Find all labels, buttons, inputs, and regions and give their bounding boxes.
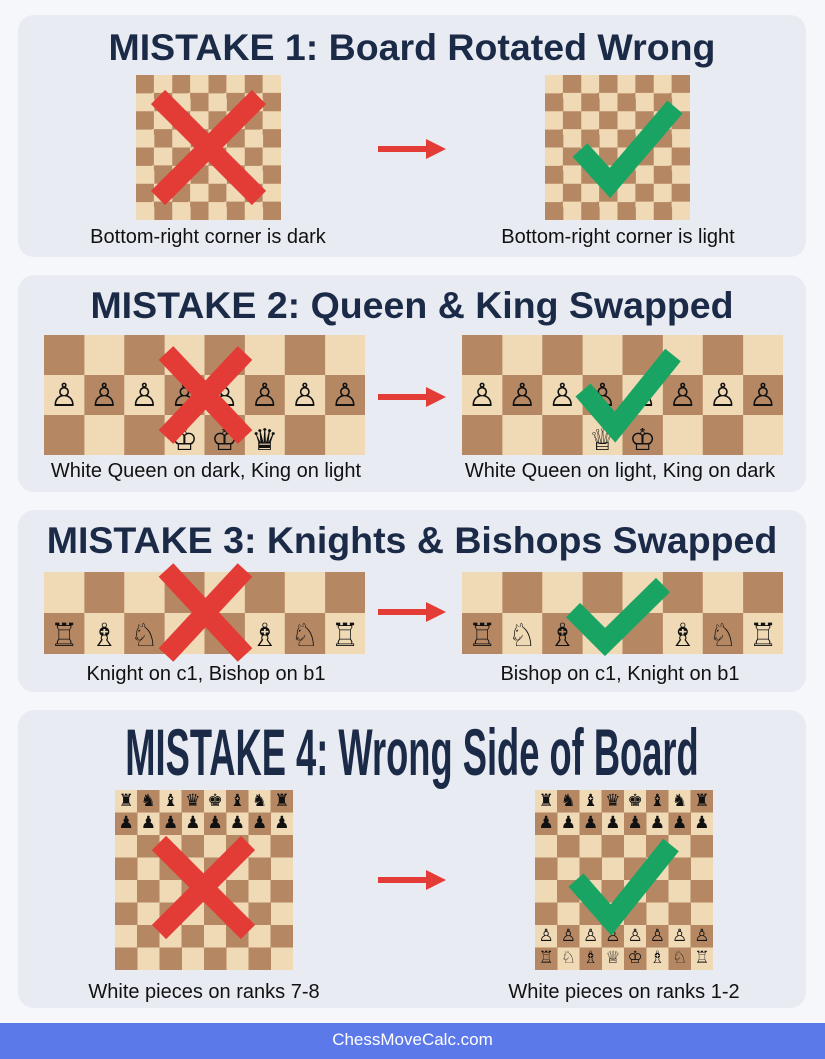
board: wrong side: ♛ xyxy=(185,791,200,811)
panel: mistake 4 xyxy=(18,710,806,1008)
board: queen king correct: ♙ xyxy=(749,376,777,414)
board: correct side: ♙ xyxy=(583,926,598,946)
board: wrong rotation xyxy=(136,75,281,220)
caption 4 right: White pieces on ranks 1-2 xyxy=(508,981,740,1003)
board: correct side: ♙ xyxy=(672,926,687,946)
board: correct side: ♜ xyxy=(538,791,554,811)
board: queen king correct: ♙ xyxy=(548,376,577,414)
board: queen king wrong: ♛ xyxy=(251,423,278,458)
board: correct side xyxy=(535,790,713,970)
board: correct side: ♔ xyxy=(628,948,643,968)
board: correct side: ♘ xyxy=(672,948,687,968)
board: correct side: ♟ xyxy=(605,813,620,833)
icon: red cross 3 xyxy=(158,563,252,662)
board: correct side: ♟ xyxy=(694,813,710,833)
board: wrong side: ♟ xyxy=(118,813,134,833)
board: knights bishops wrong: ♗ xyxy=(250,616,279,654)
panel: mistake 1 xyxy=(18,15,806,257)
board: knights bishops correct: ♗ xyxy=(548,616,577,654)
board: queen king wrong: ♔ xyxy=(171,423,198,458)
board: correct side: ♝ xyxy=(650,791,665,811)
board: correct side: ♟ xyxy=(583,813,598,833)
board: correct side: ♜ xyxy=(694,791,710,811)
caption 4 left: White pieces on ranks 7-8 xyxy=(88,981,320,1003)
board: knights bishops correct: ♖ xyxy=(468,616,496,654)
panel: mistake 2 xyxy=(18,275,806,492)
board: correct side: ♗ xyxy=(583,948,598,968)
board: correct side: ♝ xyxy=(583,791,598,811)
board: queen king correct: ♔ xyxy=(629,423,656,458)
board: wrong side: ♟ xyxy=(230,813,245,833)
board: queen king wrong xyxy=(44,335,365,455)
board: wrong side: ♟ xyxy=(141,813,156,833)
caption 3 right: Bishop on c1, Knight on b1 xyxy=(500,663,740,685)
board: correct side: ♟ xyxy=(628,813,643,833)
arrow 4 xyxy=(378,870,446,890)
title 4: MISTAKE 4: Wrong Side of Board xyxy=(125,715,699,789)
caption 2 right: White Queen on light, King on dark xyxy=(465,460,775,482)
icon: green check 4 xyxy=(568,838,679,936)
board: correct side: ♗ xyxy=(650,948,665,968)
footer: ChessMoveCalc.com xyxy=(332,1030,493,1049)
board: queen king wrong: ♔ xyxy=(211,423,238,458)
board: correct side: ♛ xyxy=(605,791,620,811)
board: queen king wrong: ♙ xyxy=(130,376,159,414)
title 2: MISTAKE 2: Queen & King Swapped xyxy=(90,284,734,326)
board: queen king wrong: ♙ xyxy=(250,376,279,414)
board: wrong side: ♟ xyxy=(185,813,200,833)
board: correct side: ♚ xyxy=(628,791,643,811)
board: queen king wrong: ♙ xyxy=(331,376,359,414)
board: correct side: ♟ xyxy=(650,813,665,833)
board: knights bishops wrong xyxy=(44,572,365,654)
board: wrong side xyxy=(115,790,293,970)
board: knights bishops wrong: ♖ xyxy=(331,616,359,654)
board: correct side: ♟ xyxy=(538,813,554,833)
board: correct side: ♙ xyxy=(561,926,576,946)
board: queen king wrong: ♙ xyxy=(210,376,239,414)
board: correct side: ♙ xyxy=(694,926,710,946)
board: knights bishops correct: ♘ xyxy=(508,616,537,654)
board: correct side: ♞ xyxy=(672,791,687,811)
board: wrong side: ♟ xyxy=(208,813,223,833)
board: wrong side: ♟ xyxy=(252,813,267,833)
board: correct rotation xyxy=(545,75,690,220)
board: wrong side: ♝ xyxy=(163,791,178,811)
board: queen king correct: ♕ xyxy=(589,423,616,458)
board: queen king correct: ♙ xyxy=(668,376,697,414)
arrow 1 xyxy=(378,139,446,159)
title 1: MISTAKE 1: Board Rotated Wrong xyxy=(109,26,715,68)
board: queen king correct: ♙ xyxy=(468,376,496,414)
caption 1 left: Bottom-right corner is dark xyxy=(90,226,326,248)
board: knights bishops wrong: ♗ xyxy=(90,616,119,654)
board: knights bishops correct: ♖ xyxy=(749,616,777,654)
board: correct side: ♟ xyxy=(561,813,576,833)
footer xyxy=(0,1023,825,1059)
board: wrong side: ♞ xyxy=(141,791,156,811)
board: correct side: ♞ xyxy=(561,791,576,811)
icon: red cross 4 xyxy=(152,836,255,940)
board: knights bishops correct: ♘ xyxy=(708,616,737,654)
board: knights bishops wrong: ♘ xyxy=(290,616,319,654)
board: correct side: ♘ xyxy=(561,948,576,968)
caption 2 left: White Queen on dark, King on light xyxy=(51,460,361,482)
board: knights bishops wrong: ♘ xyxy=(130,616,159,654)
board: correct side: ♙ xyxy=(628,926,643,946)
board: queen king correct: ♙ xyxy=(588,376,617,414)
board: correct side: ♖ xyxy=(538,948,554,968)
board: knights bishops correct xyxy=(462,572,783,654)
board: wrong side: ♚ xyxy=(208,791,223,811)
board: queen king correct: ♙ xyxy=(508,376,537,414)
board: wrong side: ♝ xyxy=(230,791,245,811)
title 3: MISTAKE 3: Knights & Bishops Swapped xyxy=(47,519,777,561)
board: correct side: ♙ xyxy=(605,926,620,946)
board: wrong side: ♜ xyxy=(118,791,134,811)
board: wrong side: ♟ xyxy=(274,813,290,833)
board: queen king wrong: ♙ xyxy=(50,376,78,414)
board: correct side: ♕ xyxy=(605,948,620,968)
board: correct side: ♖ xyxy=(694,948,710,968)
board: queen king correct: ♙ xyxy=(628,376,657,414)
panel: mistake 3 xyxy=(18,510,806,692)
board: queen king wrong: ♙ xyxy=(170,376,199,414)
icon: green check 1 xyxy=(572,100,682,198)
board: correct side: ♙ xyxy=(538,926,554,946)
board: wrong side: ♟ xyxy=(163,813,178,833)
icon: green check 3 xyxy=(566,578,670,656)
board: correct side: ♟ xyxy=(672,813,687,833)
caption 3 left: Knight on c1, Bishop on b1 xyxy=(86,663,326,685)
board: knights bishops correct: ♗ xyxy=(668,616,697,654)
arrow 3 xyxy=(378,602,446,622)
arrow 2 xyxy=(378,387,446,407)
board: wrong side: ♜ xyxy=(274,791,290,811)
board: queen king correct xyxy=(462,335,783,455)
board: queen king wrong: ♙ xyxy=(90,376,119,414)
board: queen king correct: ♙ xyxy=(708,376,737,414)
icon: red cross 1 xyxy=(151,90,266,206)
board: correct side: ♙ xyxy=(650,926,665,946)
caption 1 right: Bottom-right corner is light xyxy=(501,226,735,248)
icon: red cross 2 xyxy=(158,346,252,444)
icon: green check 2 xyxy=(576,348,681,443)
board: queen king wrong: ♙ xyxy=(290,376,319,414)
board: knights bishops wrong: ♖ xyxy=(50,616,78,654)
board: wrong side: ♞ xyxy=(252,791,267,811)
